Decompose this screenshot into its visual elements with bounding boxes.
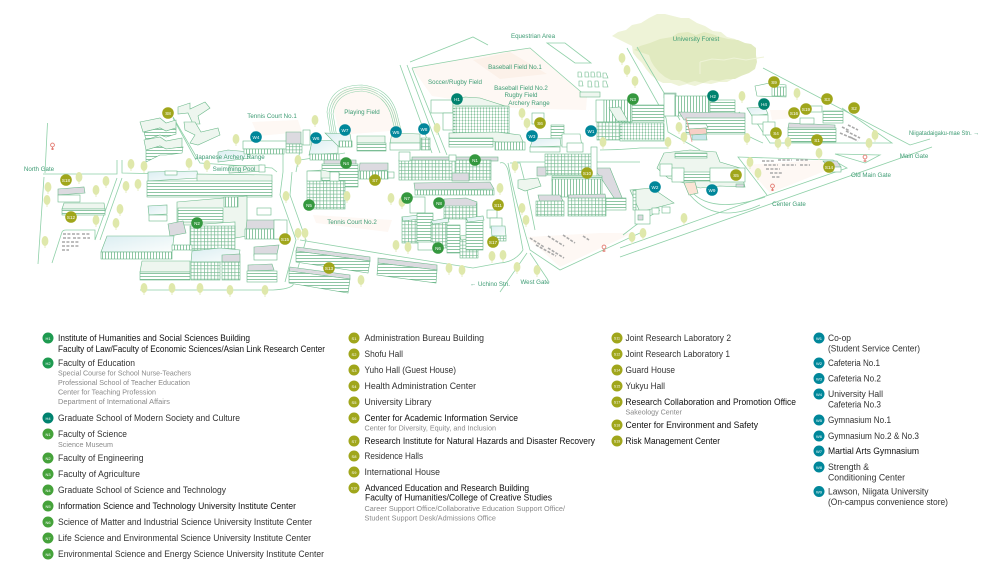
place names: ← Uchino Stn.	[470, 281, 510, 288]
map badges: S14	[825, 165, 834, 170]
building: faculty of engineering complex	[101, 236, 279, 282]
map badges: N2	[194, 221, 200, 226]
map badges: S9	[771, 80, 777, 85]
building: international house	[755, 83, 786, 97]
place names: Soccer/Rugby Field	[428, 79, 483, 86]
legend item N4: N4	[45, 488, 51, 493]
playing field track	[327, 85, 401, 138]
legend item N3: Faculty of Agriculture	[58, 469, 140, 479]
map badges: S16	[790, 111, 799, 116]
map badges: S6	[537, 121, 543, 126]
legend item W5: W5	[816, 418, 823, 423]
building: humanities and law towers	[431, 97, 525, 150]
legend item W8: Strength &	[828, 462, 869, 472]
legend item N1: Faculty of Science	[58, 429, 127, 439]
legend item H1: Institute of Humanities and Social Sciences Building	[58, 333, 250, 343]
university forest	[612, 14, 764, 86]
legend item S12: Joint Research Laboratory 1	[626, 349, 730, 359]
legend item W1: (Student Service Center)	[828, 344, 920, 354]
legend item W3	[814, 373, 881, 384]
legend item N2: N2	[45, 456, 51, 461]
legend item W8	[814, 462, 905, 482]
legend item S14: Guard House	[626, 365, 675, 375]
legend item H2: Faculty of Education	[58, 358, 135, 368]
legend item W9	[814, 486, 948, 507]
building: gate side halls	[58, 187, 105, 215]
building: joint research laboratories	[487, 210, 506, 241]
trees	[42, 53, 878, 297]
legend item S18: S18	[614, 424, 620, 428]
legend item N3: N3	[45, 472, 51, 477]
legend item S7: Research Institute for Natural Hazards and Disaster Recovery	[364, 436, 595, 446]
legend item S8: S8	[352, 454, 357, 459]
map badges: S2	[851, 106, 857, 111]
legend item H1	[42, 332, 325, 354]
place names: Swimming Pool	[213, 166, 255, 173]
building: library complex	[657, 150, 745, 195]
building: university institute towers	[402, 197, 484, 258]
building: faculty of science block	[399, 152, 498, 195]
legend item S3: Yuho Hall (Guest House)	[364, 365, 456, 375]
map badges: S10	[583, 171, 592, 176]
map badges: S5	[733, 173, 739, 178]
building: hazards institute	[359, 163, 394, 179]
map badges: S13	[325, 266, 334, 271]
map badges: H1	[454, 97, 460, 102]
legend column 3: research offices	[612, 332, 796, 446]
restroom pins	[51, 143, 867, 252]
building: graduate school of modern society	[747, 107, 775, 135]
map badges: S7	[372, 178, 378, 183]
legend item S17: S17	[614, 401, 620, 405]
legend item W5	[814, 414, 891, 426]
building: faculty of education towers	[664, 93, 745, 142]
legend item W5: Gymnasium No.1	[828, 415, 891, 425]
legend item H4: Graduate School of Modern Society and Culture	[58, 413, 240, 423]
place names: Equestrian Area	[511, 33, 556, 40]
legend item S17: Sakeology Center	[626, 408, 682, 416]
legend item H4: H4	[45, 416, 51, 421]
place names: Baseball Field No.1	[488, 64, 542, 71]
legend item N7: Life Science and Environmental Science University Institute Center	[58, 533, 311, 543]
legend item N2: Faculty of Engineering	[58, 453, 144, 463]
legend item S10: Student Support Desk/Admissions Office	[364, 514, 496, 522]
legend item S19: S19	[614, 440, 620, 444]
legend item S1: Administration Bureau Building	[364, 333, 484, 343]
legend item N4: Graduate School of Science and Technology	[58, 485, 226, 495]
legend item S10: Career Support Office/Collaborative Education Support Office/	[364, 504, 566, 513]
legend item S2: S2	[352, 352, 357, 357]
legend item W9: Lawson, Niigata University	[828, 486, 929, 496]
map badges: S17	[489, 240, 498, 245]
legend item S2: Shofu Hall	[364, 349, 403, 359]
map badges: N3	[630, 97, 636, 102]
legend item W4: Cafeteria No.3	[828, 400, 881, 410]
map badges: S11	[494, 203, 502, 208]
building: administration bureau	[788, 106, 843, 142]
legend item H1: Faculty of Law/Faculty of Economic Sciences/Asian Link Research Center	[58, 344, 325, 354]
legend item W7: W7	[816, 449, 823, 454]
legend item W7: Martial Arts Gymnasium	[828, 446, 919, 456]
legend item S18: Center for Environment and Safety	[626, 420, 758, 430]
legend item S6	[348, 412, 518, 432]
place names: Archery Range	[508, 100, 550, 107]
map badges: W6	[313, 136, 320, 141]
place names: North Gate	[24, 166, 55, 173]
map badges: W9	[709, 188, 716, 193]
building: residence halls	[140, 102, 220, 162]
building: co-op and faculty of agriculture	[580, 92, 664, 141]
legend item S10: Advanced Education and Research Building	[365, 483, 529, 493]
legend item S7: S7	[352, 439, 357, 444]
legend item S5: S5	[352, 400, 357, 405]
legend item N1: Science Museum	[58, 440, 113, 449]
legend item W2: W2	[816, 361, 823, 366]
legend item S14: S14	[614, 369, 620, 373]
legend item N7: N7	[45, 536, 51, 541]
legend item W3: Cafeteria No.2	[828, 374, 881, 384]
building: yukyu hall rows	[289, 247, 437, 293]
legend item H2: Professional School of Teacher Education	[58, 378, 190, 387]
legend item W2	[814, 358, 880, 368]
place names: Center Gate	[772, 201, 806, 208]
map badges: N5	[306, 203, 312, 208]
legend item S14	[612, 364, 675, 376]
legend item S11: S11	[614, 337, 620, 341]
place names: Tennis Court No.1	[247, 113, 297, 120]
place names: Rugby Field	[504, 92, 538, 99]
legend item W4: University Hall	[828, 389, 883, 399]
legend item W2: Cafeteria No.1	[828, 358, 880, 368]
map badges: N6	[435, 246, 441, 251]
place names: Playing Field	[344, 109, 380, 116]
place names: Old Main Gate	[851, 172, 891, 179]
parking areas	[62, 125, 860, 258]
map badges: W1	[588, 129, 595, 134]
building: archery and pool	[218, 150, 265, 173]
map badges: S3	[824, 97, 830, 102]
legend item H2	[42, 358, 191, 406]
legend item N6: N6	[45, 520, 51, 525]
legend column 1: humanities and science	[42, 332, 325, 560]
map badges: W4	[253, 135, 260, 140]
legend item H1: H1	[45, 336, 51, 341]
legend item S15	[612, 380, 665, 392]
legend item S5: University Library	[364, 397, 432, 407]
roads	[38, 37, 932, 292]
legend item H2: Department of International Affairs	[58, 397, 170, 406]
building: information service and cafeteria no.2	[530, 113, 583, 152]
legend item W1	[814, 332, 920, 354]
building: gymnasium no.1 and martial arts	[357, 133, 430, 151]
legend item S19: Risk Management Center	[626, 436, 720, 446]
place names	[24, 33, 979, 288]
legend item W4: W4	[816, 392, 823, 397]
legend item S1: S1	[352, 336, 357, 341]
map badges: S8	[165, 111, 171, 116]
map badges: S18	[62, 178, 71, 183]
legend item W6: Gymnasium No.2 & No.3	[828, 431, 919, 441]
map badges: S1	[814, 138, 820, 143]
legend column 2: administration	[348, 332, 595, 522]
legend item S10: S10	[351, 487, 357, 491]
map badges: N1	[472, 158, 478, 163]
map badges: W3	[529, 134, 536, 139]
legend item N1: N1	[45, 432, 51, 437]
legend item N6: Science of Matter and Industrial Science University Institute Center	[58, 517, 312, 527]
map badges: W5	[393, 130, 400, 135]
legend item W9: (On-campus convenience store)	[828, 497, 948, 507]
building: cafeteria no.1	[630, 188, 674, 224]
map badges	[60, 76, 860, 274]
legend item N8: Environmental Science and Energy Science University Institute Center	[58, 549, 324, 559]
legend item S6: Center for Academic Information Service	[364, 413, 518, 423]
place names: Main Gate	[900, 153, 929, 160]
legend item W6: W6	[816, 434, 823, 439]
place names: University Forest	[673, 36, 719, 43]
map badges: S15	[281, 237, 290, 242]
map badges: H4	[761, 102, 767, 107]
legend item W8: W8	[816, 465, 823, 470]
legend item H2: Center for Teaching Profession	[58, 388, 156, 396]
legend item S8	[348, 450, 423, 462]
legend item S4: S4	[352, 384, 357, 389]
legend item W1: Co-op	[828, 333, 851, 343]
legend item S3: S3	[352, 368, 357, 373]
place names: Japanese Archery Range	[195, 154, 265, 161]
legend item S9: International House	[364, 467, 440, 477]
map badges: W2	[652, 185, 659, 190]
map badges: W7	[342, 128, 349, 133]
legend item W8: Conditioning Center	[828, 472, 905, 482]
map badges: S12	[67, 215, 76, 220]
place names: Niigatadaigaku-mae Stn. →	[909, 130, 979, 137]
legend item W9: W9	[816, 489, 823, 494]
bicycle parking	[578, 72, 608, 87]
legend item S2	[348, 348, 403, 360]
legend item S6: Center for Diversity, Equity, and Inclusion	[364, 423, 496, 432]
building: university hall	[243, 130, 310, 154]
map badges: H2	[710, 94, 716, 99]
building: gymnasium no.2	[309, 133, 352, 160]
sports fields	[252, 48, 835, 267]
map badges: N8	[436, 201, 442, 206]
building: guard house	[823, 161, 841, 172]
legend item N8: N8	[45, 552, 51, 557]
map	[24, 14, 979, 297]
place names: Baseball Field No.2	[494, 85, 548, 92]
map badges: N4	[343, 161, 349, 166]
legend item S6: S6	[352, 416, 357, 421]
legend item S17	[612, 396, 796, 416]
map badges: W8	[421, 127, 428, 132]
legend item W3: W3	[816, 376, 823, 381]
legend item W1: W1	[816, 336, 823, 341]
legend column 4: welfare facilities	[814, 332, 948, 507]
map badges: S19	[802, 107, 811, 112]
legend item N5: Information Science and Technology University Institute Center	[58, 501, 296, 511]
building: graduate school block	[307, 160, 358, 209]
building: advanced education and research	[518, 147, 626, 216]
legend item S10: Faculty of Humanities/College of Creative Studies	[365, 492, 552, 502]
legend item H2: H2	[45, 361, 51, 366]
place names: Tennis Court No.2	[327, 219, 377, 226]
legend item S9: S9	[352, 470, 357, 475]
map badges: N7	[404, 196, 410, 201]
place names: West Gate	[520, 279, 550, 286]
legend item S17: Research Collaboration and Promotion Office	[626, 397, 796, 407]
legend item S4: Health Administration Center	[364, 381, 476, 391]
legend item N5: N5	[45, 504, 51, 509]
legend item S15: Yukyu Hall	[626, 381, 665, 391]
legend item W4	[814, 388, 883, 410]
building: science block	[148, 196, 287, 250]
map badges: S4	[773, 131, 779, 136]
legend item S12: S12	[614, 353, 620, 357]
legend item S11: Joint Research Laboratory 2	[626, 333, 731, 343]
legend item S8: Residence Halls	[364, 451, 423, 461]
building: long north block	[147, 171, 272, 197]
legend item H2: Special Course for School Nurse-Teachers	[58, 368, 191, 378]
legend item N1	[42, 428, 127, 449]
legend item S10	[348, 482, 566, 522]
legend item S15: S15	[614, 385, 620, 389]
